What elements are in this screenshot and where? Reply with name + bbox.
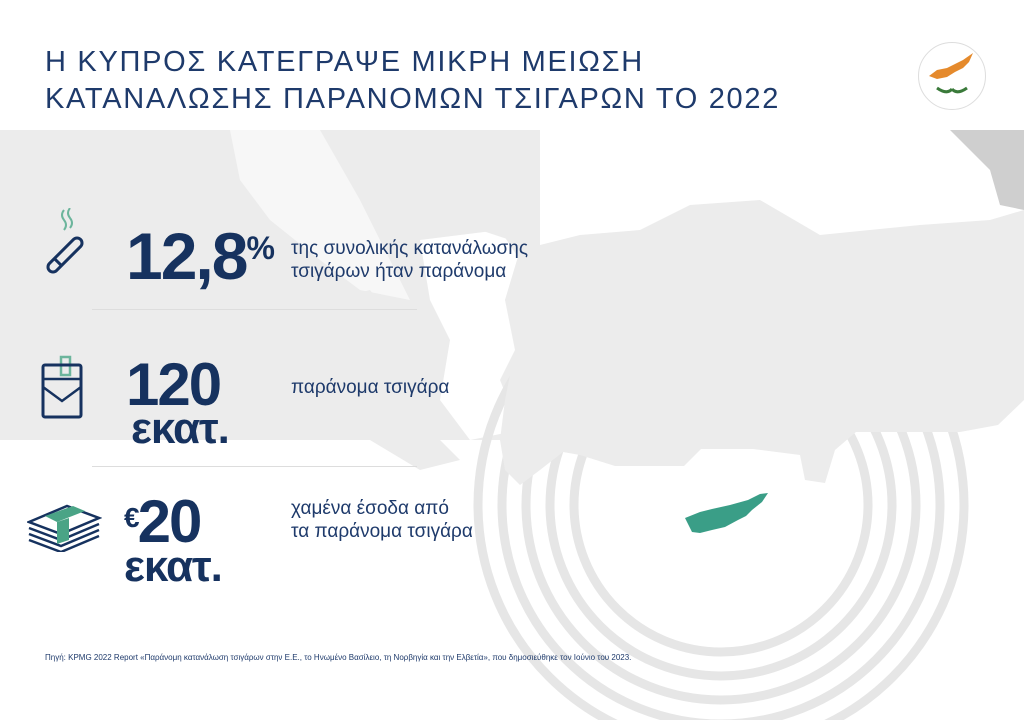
number: 12,8% [126, 219, 275, 293]
text: τα παράνομα τσιγάρα [291, 521, 473, 542]
source: Πηγή: KPMG 2022 Report «Παράνομη κατανάλωση τσιγάρων στην Ε.Ε., το Ηνωμένο Βασίλειο, τη Νορβηγία και την Ελβετία», που δημοσιεύθηκε τον Ιούνιο του 2023. [45, 653, 631, 662]
text: χαμένα έσοδα από [291, 498, 449, 519]
cyprus [685, 493, 768, 533]
title: ΚΑΤΑΝΑΛΩΣΗΣ ΠΑΡΑΝΟΜΩΝ ΤΣΙΓΑΡΩΝ ΤΟ 2022 [45, 83, 780, 115]
icon: money stack [27, 504, 102, 552]
text [291, 498, 473, 542]
number: €20 [124, 488, 200, 555]
text: τσιγάρων ήταν παράνομα [291, 261, 506, 282]
text [291, 238, 528, 282]
title: Η ΚΥΠΡΟΣ ΚΑΤΕΓΡΑΨΕ ΜΙΚΡΗ ΜΕΙΩΣΗ [45, 46, 644, 78]
stat 2 [42, 351, 449, 453]
icon: cigarette [46, 208, 84, 274]
title [45, 46, 780, 115]
text: της συνολικής κατανάλωσης [291, 238, 528, 259]
stat 3: εκατ. [124, 542, 222, 591]
stat 2: εκατ. [131, 404, 229, 453]
stat 1 [46, 208, 528, 293]
stat 3 [27, 488, 473, 591]
number: 120 [126, 351, 220, 418]
icon: cigarette pack [42, 356, 82, 418]
icon: cyprus flag [918, 42, 986, 110]
text: παράνομα τσιγάρα [291, 377, 449, 398]
